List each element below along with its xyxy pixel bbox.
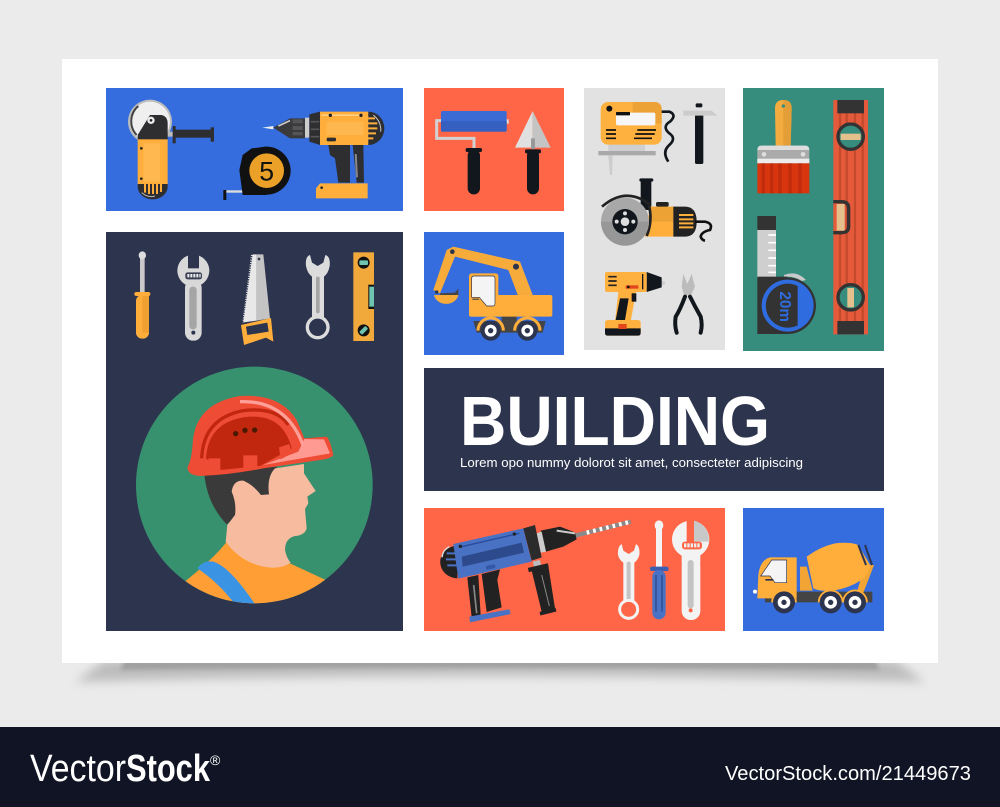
icon: spirit level xyxy=(353,252,374,341)
icon: long spirit level xyxy=(833,100,868,334)
panel: roller and trowel xyxy=(424,88,564,211)
icon: cordless drill xyxy=(262,112,384,198)
white card xyxy=(62,59,938,663)
avatar background xyxy=(136,367,373,603)
heading: BUILDING xyxy=(460,382,770,460)
panel: power tools on grey xyxy=(584,88,725,350)
panel: brush level and tape on green xyxy=(743,88,884,351)
icon: tape measure 20m: 20m xyxy=(776,291,793,322)
icon: excavator xyxy=(433,247,552,341)
icon: jigsaw xyxy=(598,102,674,175)
icon: white spanner xyxy=(618,544,640,618)
icon: adjustable wrench xyxy=(177,252,209,341)
icon: angle grinder xyxy=(128,100,214,199)
shirt xyxy=(185,542,326,604)
subtitle: Lorem opo nummy dolorot sit amet, consecteter adipiscing xyxy=(460,455,803,470)
registered mark: ® xyxy=(210,752,221,768)
icon: white adjustable wrench xyxy=(672,518,709,620)
icon: paint roller xyxy=(437,111,509,194)
footer logo: Vector xyxy=(30,748,126,790)
icon: screwdriver xyxy=(134,251,150,339)
panel: grinder drill and tape xyxy=(106,88,403,211)
panel: hand tools and worker xyxy=(106,232,403,631)
icon: hand saw xyxy=(241,254,273,345)
icon: paint brush xyxy=(757,100,809,193)
icon: mixer truck xyxy=(753,543,874,613)
icon: small drill xyxy=(605,272,665,336)
strap xyxy=(197,561,257,607)
icon: tape measure 5: 5 xyxy=(259,156,274,186)
card shadow xyxy=(75,660,925,682)
footer logo bold part: Stock xyxy=(126,748,211,790)
panel: title banner xyxy=(424,368,884,491)
icon: trowel xyxy=(515,111,551,194)
icon: blue screwdriver xyxy=(650,520,669,619)
helmet xyxy=(188,396,333,476)
panel: cement mixer xyxy=(743,508,884,631)
icon: pliers xyxy=(675,274,702,333)
icon: tape measure 20m xyxy=(757,216,816,334)
footer bar xyxy=(0,727,1000,807)
face xyxy=(226,464,316,568)
icon: tape measure 5 xyxy=(223,147,291,200)
panel: hammer drill and tools on red xyxy=(424,508,725,631)
icon: hammer xyxy=(683,103,717,164)
icon: circular grinder xyxy=(601,178,711,246)
icon: spanner xyxy=(306,255,330,338)
icon: hammer drill xyxy=(440,522,631,622)
footer image id: VectorStock.com/21449673 xyxy=(725,763,971,785)
hair xyxy=(204,467,277,524)
worker figure xyxy=(185,396,334,604)
panel: excavator xyxy=(424,232,564,355)
